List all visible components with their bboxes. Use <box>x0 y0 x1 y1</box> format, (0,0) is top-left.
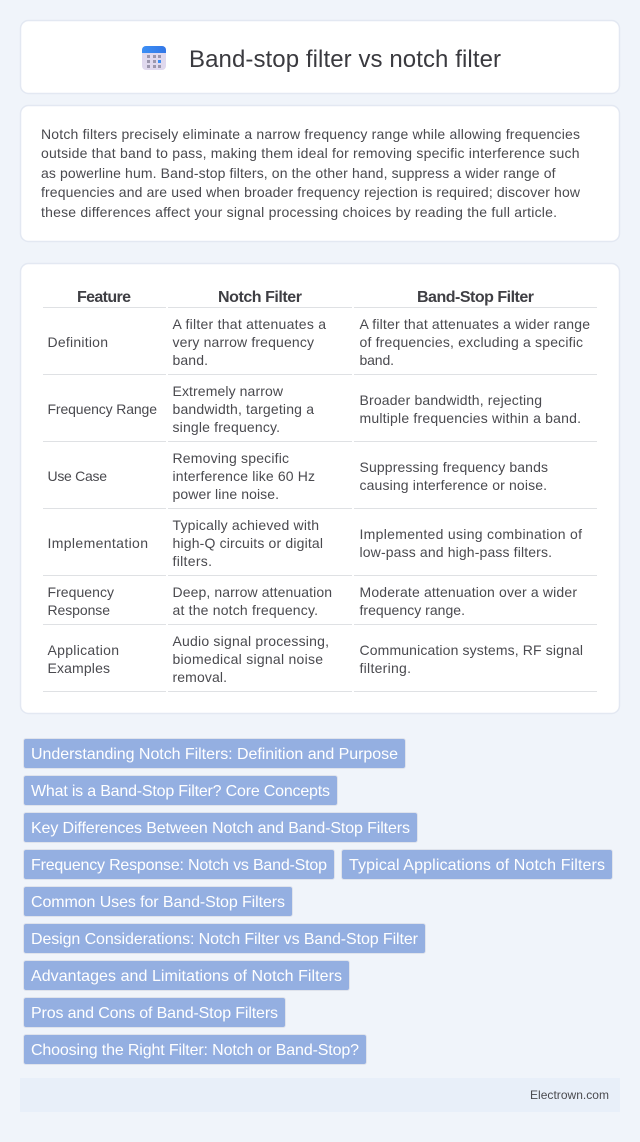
row: frequency response <box>43 584 597 625</box>
row: definition: band. <box>360 352 394 368</box>
text block: introduction paragraph: these differences affect your signal processing choices by reading the full article. <box>41 204 557 220</box>
tag: frequency response <box>24 850 334 880</box>
row: application examples: Application <box>48 642 119 658</box>
tag: design considerations <box>24 924 426 954</box>
tag: pros and cons <box>24 998 286 1028</box>
footer: Electrown.com <box>530 1088 609 1102</box>
tag: what is a band-stop filter <box>24 776 338 806</box>
text block: introduction paragraph: Notch filters precisely eliminate a narrow frequency range while allowing frequencies <box>41 126 580 142</box>
row: application examples: Examples <box>48 660 110 676</box>
panel: introduction <box>20 106 620 242</box>
row: frequency range: multiple frequencies within a band. <box>360 410 581 426</box>
row: application examples: filtering. <box>360 660 411 676</box>
row: definition: A filter that attenuates a <box>172 316 326 332</box>
row: frequency response: Moderate attenuation over a wider <box>360 584 577 600</box>
tag: typical applications: Typical Applications of Notch Filters <box>349 857 605 874</box>
tag: choosing the right filter <box>24 1034 366 1064</box>
text block: introduction paragraph: as powerline hum. Band-stop filters, on the other hand, suppress a wider range of <box>41 165 556 181</box>
tag: key differences: Key Differences Between Notch and Band-Stop Filters <box>31 820 410 837</box>
row: frequency range: Extremely narrow <box>172 383 284 399</box>
tag: choosing the right filter: Choosing the Right Filter: Notch or Band-Stop? <box>31 1042 359 1059</box>
row: implementation <box>43 517 597 576</box>
row: implementation: filters. <box>172 553 212 569</box>
row: frequency range: bandwidth, targeting a <box>172 401 314 417</box>
row: use case: power line noise. <box>172 486 279 502</box>
row: application examples: biomedical signal noise <box>172 651 323 667</box>
title: Band-stop filter vs notch filter <box>189 46 501 73</box>
tag: advantages and limitations: Advantages and Limitations of Notch Filters <box>31 968 342 985</box>
row: frequency range: single frequency. <box>172 419 280 435</box>
text block: introduction paragraph: frequencies and are used when broader frequency rejection is required; discover how <box>41 184 581 200</box>
table header row <box>43 289 597 308</box>
tag: design considerations: Design Considerations: Notch Filter vs Band-Stop Filter <box>31 931 419 948</box>
row: definition <box>43 316 597 375</box>
text block: introduction paragraph <box>41 126 581 220</box>
row: implementation: Implemented using combination of <box>360 526 582 542</box>
row: use case: Use Case <box>48 468 107 484</box>
panel: comparison table <box>20 264 620 714</box>
row: application examples: removal. <box>172 669 227 685</box>
row: frequency response: frequency range. <box>360 602 465 618</box>
row: implementation: low-pass and high-pass filters. <box>360 544 552 560</box>
row: implementation: Implementation <box>48 535 148 551</box>
tag: what is a band-stop filter: What is a Band-Stop Filter? Core Concepts <box>31 783 330 800</box>
tag: pros and cons: Pros and Cons of Band-Stop Filters <box>31 1005 278 1022</box>
row: frequency range: Broader bandwidth, rejecting <box>360 392 542 408</box>
tag: frequency response: Frequency Response: Notch vs Band-Stop <box>31 857 327 874</box>
row: implementation: high-Q circuits or digital <box>172 535 323 551</box>
row: use case: interference like 60 Hz <box>172 468 315 484</box>
row: frequency range <box>43 383 597 442</box>
tag: key differences <box>24 812 418 842</box>
row: definition: Definition <box>48 334 108 350</box>
table header row: Band-Stop Filter <box>417 289 534 306</box>
row: frequency response: Deep, narrow attenuation <box>172 584 332 600</box>
panel: header <box>20 20 620 94</box>
row: implementation: Typically achieved with <box>172 517 319 533</box>
topic tags <box>24 738 612 1064</box>
row: definition: of frequencies, excluding a specific <box>360 334 583 350</box>
row: frequency range: Frequency Range <box>48 401 157 417</box>
row: frequency response: at the notch frequency. <box>172 602 318 618</box>
tag: typical applications <box>342 850 612 880</box>
tag: understanding notch filters <box>24 738 406 768</box>
tag: common uses <box>24 886 292 916</box>
row: frequency response: Frequency <box>48 584 114 600</box>
tag: understanding notch filters: Understanding Notch Filters: Definition and Purpose <box>31 746 398 763</box>
row: definition: band. <box>172 352 208 368</box>
row: use case: Suppressing frequency bands <box>360 459 548 475</box>
row: use case: causing interference or noise. <box>360 477 547 493</box>
table header row: Feature <box>77 289 131 306</box>
tag: advantages and limitations <box>24 960 350 990</box>
row: definition: A filter that attenuates a wider range <box>360 316 590 332</box>
icon: calendar grid <box>142 46 166 70</box>
row: application examples: Audio signal processing, <box>172 633 329 649</box>
footer <box>20 1078 620 1112</box>
row: application examples <box>43 633 597 692</box>
tag: common uses: Common Uses for Band-Stop Filters <box>31 894 285 911</box>
table header row: Notch Filter <box>218 289 302 306</box>
row: application examples: Communication systems, RF signal <box>360 642 583 658</box>
row: use case <box>43 450 597 509</box>
text block: introduction paragraph: outside that band to pass, making them ideal for removing specific interference such <box>41 145 580 161</box>
row: use case: Removing specific <box>172 450 289 466</box>
row: definition: very narrow frequency <box>172 334 314 350</box>
row: frequency response: Response <box>48 602 110 618</box>
